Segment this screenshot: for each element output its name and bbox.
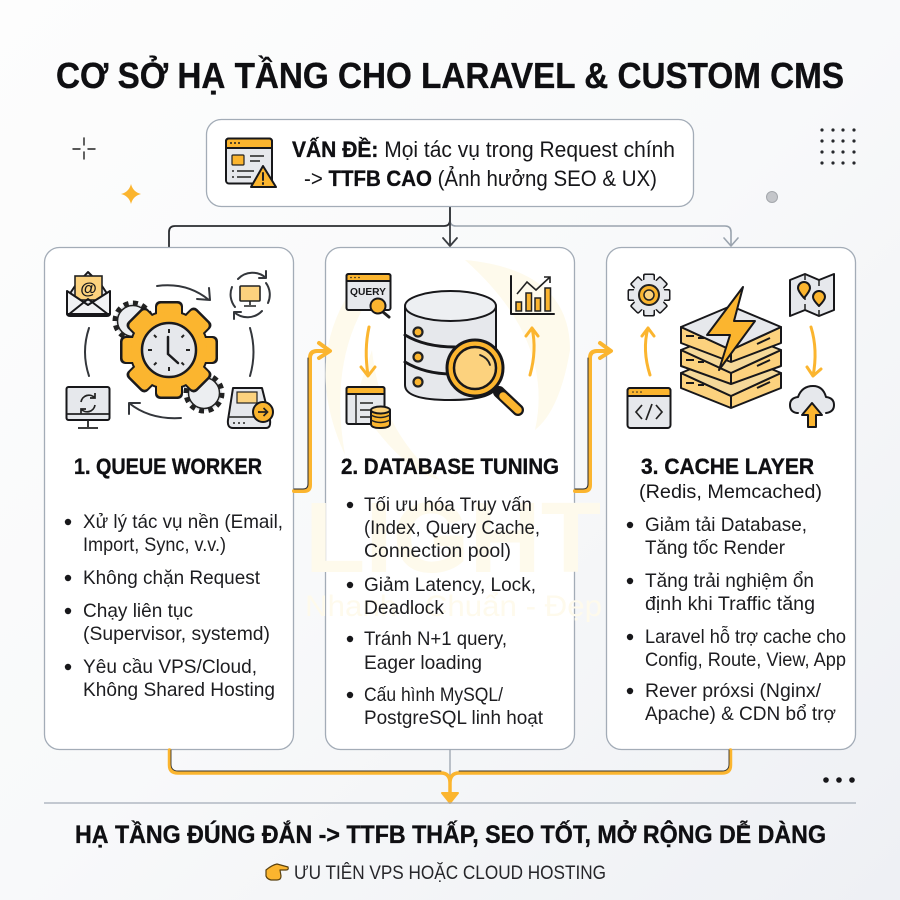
watermark logo arcs xyxy=(326,260,570,480)
list: cache layer: Giảm tải Database, xyxy=(645,514,807,536)
icon: monitor refresh xyxy=(231,271,270,319)
list: database tuning: Giảm Latency, Lock, xyxy=(364,574,536,596)
icon: small gears xyxy=(115,303,222,411)
icon: database cylinder xyxy=(405,291,496,400)
decoration: crosshair xyxy=(73,138,95,159)
icon: query window xyxy=(346,274,390,317)
list: queue worker: Xử lý tác vụ nền (Email, xyxy=(83,511,283,533)
decoration: three dots xyxy=(823,777,855,783)
watermark: LIGHT xyxy=(305,482,601,594)
list: cache layer: Config, Route, View, App xyxy=(645,649,846,671)
list: database tuning: Tránh N+1 query, xyxy=(364,628,507,650)
icon: main gear with clock xyxy=(120,301,218,399)
arrow: cycle bottom xyxy=(129,403,181,418)
list: database tuning: Tối ưu hóa Truy vấn xyxy=(364,494,532,516)
list: queue worker: Yêu cầu VPS/Cloud, xyxy=(83,656,257,678)
decoration: dot grid xyxy=(820,128,856,165)
heading: database tuning: 2. DATABASE TUNING xyxy=(341,454,559,479)
icon: settings gear xyxy=(628,274,670,316)
icon: bar chart xyxy=(511,276,554,314)
arrow: cycle top xyxy=(157,285,210,300)
problem text xyxy=(292,137,675,191)
list: database tuning: Cấu hình MySQL/ xyxy=(364,684,504,706)
list: queue worker: Import, Sync, v.v.) xyxy=(83,534,226,556)
panel: queue worker xyxy=(44,248,294,750)
heading: cache layer: 3. CACHE LAYER xyxy=(641,454,814,479)
icon: envelope xyxy=(67,272,110,316)
list: queue worker: Chạy liên tục xyxy=(83,600,193,622)
panel: cache layer xyxy=(606,248,856,750)
icon: query window: QUERY xyxy=(350,286,386,298)
list: cache layer xyxy=(627,514,846,725)
list: database tuning xyxy=(347,494,544,729)
list: cache layer: định khi Traffic tăng xyxy=(645,593,815,615)
recommendation text: ƯU TIÊN VPS HOẶC CLOUD HOSTING xyxy=(294,862,606,884)
list: queue worker: (Supervisor, systemd) xyxy=(83,623,270,645)
list: queue worker: Không chặn Request xyxy=(83,567,261,589)
list: cache layer: Apache) & CDN bổ trợ xyxy=(645,703,836,725)
icon: server drive xyxy=(228,388,273,428)
conclusion heading: HẠ TẦNG ĐÚNG ĐẮN -> TTFB THẤP, SEO TỐT, MỞ RỘNG DỄ DÀNG xyxy=(75,819,826,849)
connectors: problem to cards xyxy=(169,207,738,247)
connector: database to cache xyxy=(575,343,611,491)
icon: code window xyxy=(628,388,670,428)
arrow: cycle left xyxy=(85,328,89,376)
list: database tuning: (Index, Query Cache, xyxy=(364,517,540,539)
list: cache layer: Rever próxsi (Nginx/ xyxy=(645,680,822,702)
list: cache layer: Tăng tốc Render xyxy=(645,537,785,559)
icon: map xyxy=(790,274,834,316)
list: cache layer: Tăng trải nghiệm ổn xyxy=(645,570,814,592)
icon: pointing hand xyxy=(266,864,288,880)
icon: server stack with lightning xyxy=(681,287,781,408)
list: database tuning: Connection pool) xyxy=(364,540,511,562)
heading: queue worker: 1. QUEUE WORKER xyxy=(74,454,262,479)
arrow: cycle right xyxy=(250,328,254,376)
icon: cloud upload xyxy=(790,386,834,427)
decoration: grey circle xyxy=(766,192,778,202)
list: queue worker: Không Shared Hosting xyxy=(83,679,275,701)
panel: database tuning xyxy=(326,248,574,750)
list: database tuning: PostgreSQL linh hoạt xyxy=(364,707,544,729)
divider xyxy=(44,802,856,804)
list: queue worker xyxy=(65,511,283,701)
connector: queue to database xyxy=(294,343,330,491)
list: cache layer: Laravel hỗ trợ cache cho xyxy=(645,625,846,648)
heading: cache layer xyxy=(639,454,822,503)
arrow: map to cloud xyxy=(807,327,821,376)
list: database tuning: Deadlock xyxy=(364,597,444,619)
title: CƠ SỞ HẠ TẦNG CHO LARAVEL & CUSTOM CMS xyxy=(56,54,844,96)
arrow: code to settings xyxy=(642,328,654,375)
icon: magnifier xyxy=(447,340,518,410)
problem text: VẤN ĐỀ: Mọi tác vụ trong Request chính xyxy=(292,137,675,162)
problem text: -> TTFB CAO (Ảnh hưởng SEO & UX) xyxy=(304,166,657,191)
connectors: cards to conclusion xyxy=(170,750,730,803)
arrow: query to table xyxy=(361,327,375,376)
icon: desktop sync xyxy=(66,387,110,428)
list: database tuning: Eager loading xyxy=(364,652,482,674)
decoration: sparkle xyxy=(121,184,141,204)
icon: envelope: @ xyxy=(80,279,97,298)
icon: warning window xyxy=(226,138,276,187)
icon: table with database xyxy=(346,387,390,428)
heading: cache layer: (Redis, Memcached) xyxy=(639,481,822,503)
panel: problem xyxy=(206,120,694,206)
arrow: chart up xyxy=(526,328,538,375)
watermark: Nhanh - Chuẩn - Đẹp xyxy=(305,590,602,623)
